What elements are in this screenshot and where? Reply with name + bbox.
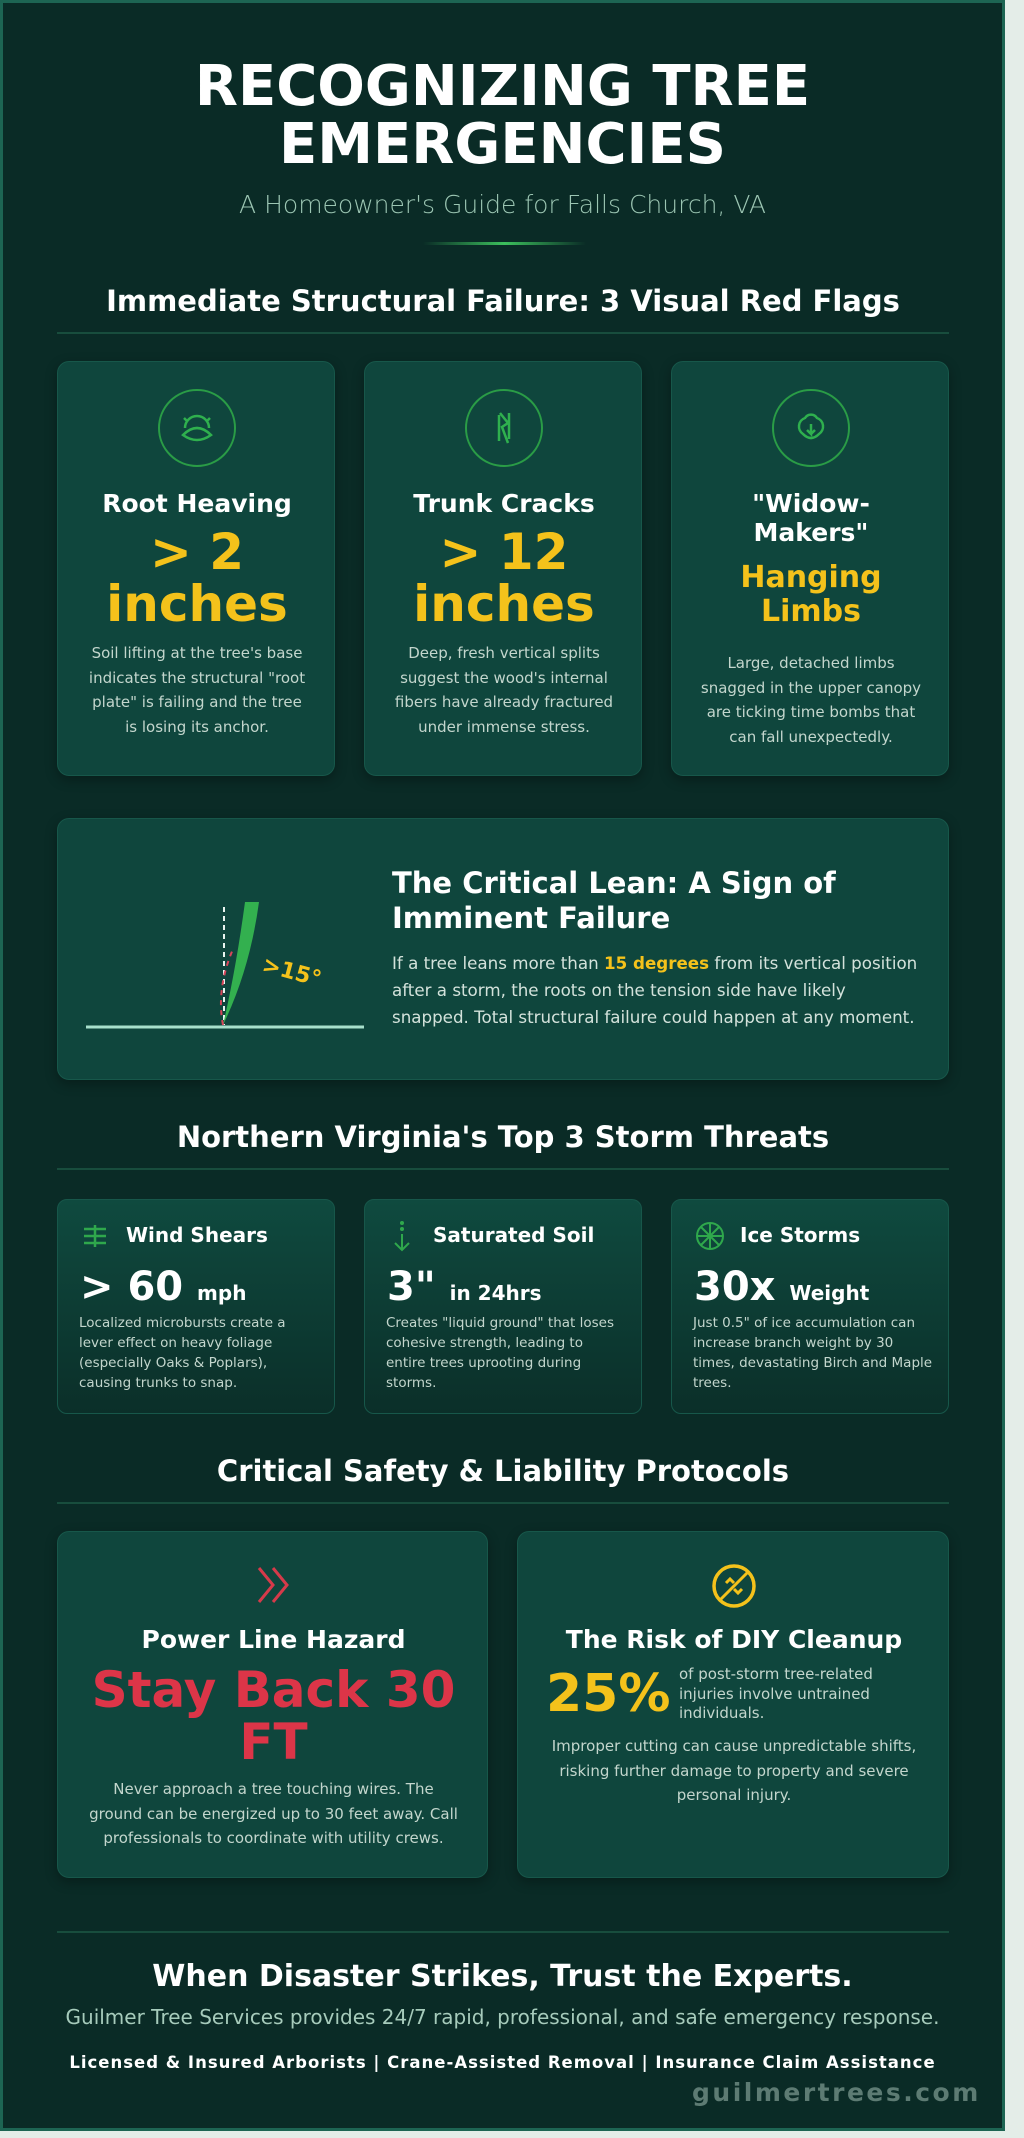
panel: power line xyxy=(57,1531,488,1878)
panel: power line: FT xyxy=(239,1713,308,1771)
title xyxy=(195,54,810,177)
panel: root heaving xyxy=(57,361,335,776)
panel: ice storms: Ice Storms xyxy=(740,1223,860,1247)
panel: power line: ground can be energized up to 30 feet away. Call professionals to coordinate with utility crews. xyxy=(89,1804,458,1847)
icon: limb xyxy=(772,389,850,467)
icon: chevrons xyxy=(258,1567,289,1603)
panel: widow-makers: Limbs xyxy=(761,594,861,629)
panel: ice storms: 30x Weight xyxy=(694,1264,869,1310)
icon: wind xyxy=(84,1225,106,1247)
panel: wind shears xyxy=(57,1199,335,1414)
title: EMERGENCIES xyxy=(279,112,726,177)
panel: saturated soil: Creates "liquid ground" that loses cohesive strength, leading to entire trees uprooting during storms. xyxy=(386,1315,614,1391)
heading: lean xyxy=(392,866,836,935)
panel: widow-makers xyxy=(671,361,949,776)
icon: root xyxy=(158,389,236,467)
panel: root heaving: inches xyxy=(106,575,288,633)
panel: trunk cracks: > 12 xyxy=(440,523,568,581)
panel: ice storms: Just 0.5" of ice accumulation can increase branch weight by 30 times, devastating Birch and Maple trees. xyxy=(693,1315,932,1391)
panel: critical lean xyxy=(57,818,949,1080)
icon: crack xyxy=(465,389,543,467)
panel: trunk cracks: inches xyxy=(413,575,595,633)
panel: power line: Stay Back 30 xyxy=(92,1661,455,1719)
panel: root heaving: is losing its anchor. xyxy=(125,718,269,736)
panel: widow-makers: "Widow- xyxy=(752,489,870,518)
panel: widow-makers: Hanging xyxy=(740,560,882,595)
panel: root heaving: Root Heaving xyxy=(102,489,292,518)
subtitle: A Homeowner's Guide for Falls Church, VA xyxy=(239,190,766,219)
footer services: Licensed & Insured Arborists | Crane-Assisted Removal | Insurance Claim Assistance xyxy=(69,2053,936,2072)
panel: wind shears: Wind Shears xyxy=(126,1223,268,1247)
panel: trunk cracks xyxy=(364,361,642,776)
panel: wind shears: Localized microbursts create a lever effect on heavy foliage (especially Oaks & Poplars), causing trunks to snap. xyxy=(79,1315,286,1391)
chart: lean diagram: >15° xyxy=(259,953,324,992)
panel: wind shears: > 60 mph xyxy=(80,1264,246,1310)
panel: root heaving: plate" is failing and the tree xyxy=(92,693,302,711)
panel: widow-makers: Large, detached limbs snagged in the upper canopy are ticking time bombs that can fall unexpectedly. xyxy=(701,654,921,746)
panel: root heaving: > 2 xyxy=(150,523,244,581)
footer heading: When Disaster Strikes, Trust the Experts. xyxy=(152,1959,853,1994)
heading: lean: Imminent Failure xyxy=(392,901,670,935)
heading: storm threats: Northern Virginia's Top 3 Storm Threats xyxy=(177,1120,829,1154)
icon: snowflake xyxy=(696,1222,724,1250)
panel: root heaving: Soil lifting at the tree's base xyxy=(92,644,302,662)
heading: safety: Critical Safety & Liability Protocols xyxy=(217,1454,789,1488)
panel: saturated soil xyxy=(364,1199,642,1414)
panel: power line: Power Line Hazard xyxy=(142,1625,405,1654)
footer text: Guilmer Tree Services provides 24/7 rapid, professional, and safe emergency response. xyxy=(66,2005,939,2029)
icon: no-cut xyxy=(712,1564,756,1608)
panel: DIY risk: The Risk of DIY Cleanup xyxy=(566,1625,902,1654)
heading: lean: The Critical Lean: A Sign of xyxy=(392,866,836,900)
panel: root heaving: indicates the structural "root xyxy=(89,668,305,686)
panel: DIY risk: of post-storm tree-related injuries involve untrained individuals. xyxy=(679,1665,873,1722)
panel: power line: Never approach a tree touching wires. The xyxy=(113,1780,434,1798)
website: guilmertrees.com xyxy=(692,2078,981,2107)
panel: DIY risk: Improper cutting can cause unpredictable shifts, risking further damage to property and severe personal injury. xyxy=(552,1737,916,1804)
panel: widow-makers: Makers" xyxy=(754,518,868,547)
title: RECOGNIZING TREE xyxy=(195,54,810,119)
text: lean: If a tree leans more than 15 degrees from its vertical position after a storm, the roots on the tension side have likely snapped. Total structural failure could happen at any moment. xyxy=(392,953,917,1027)
panel: DIY risk: 25% xyxy=(546,1664,670,1724)
panel: ice storms xyxy=(671,1199,949,1414)
panel: DIY risk xyxy=(517,1531,949,1878)
icon: drop arrow xyxy=(394,1221,410,1252)
panel: saturated soil: Saturated Soil xyxy=(433,1223,594,1247)
panel: trunk cracks: Trunk Cracks xyxy=(413,489,595,518)
panel: saturated soil: 3" in 24hrs xyxy=(387,1264,542,1310)
heading: red flags: Immediate Structural Failure: 3 Visual Red Flags xyxy=(106,284,900,318)
chart: lean diagram xyxy=(86,902,364,1028)
panel: trunk cracks: Deep, fresh vertical splits suggest the wood's internal fibers have already fractured under immense stress. xyxy=(395,644,613,736)
